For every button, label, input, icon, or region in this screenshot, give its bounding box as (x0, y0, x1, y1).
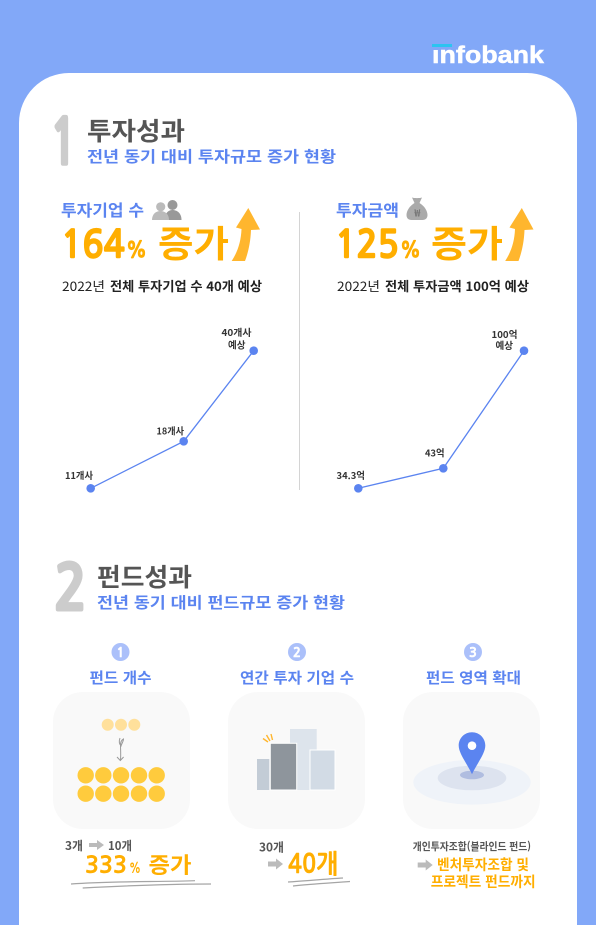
stat: 164% increase: 증가 (158, 214, 229, 268)
section 1 heading: 전년 동기 대비 투자규모 증가 현황 (87, 145, 336, 167)
stat: 164% increase: 164 (61, 226, 125, 264)
note: 2022 total companies: 2022년 (62, 276, 105, 295)
line chart: amount: 34.3억 (336, 468, 365, 482)
result: scope text: 개인투자조합(블라인드 펀드) (413, 839, 531, 854)
result: 3 to 10, 333% increase: % (129, 862, 141, 876)
line chart: amount: 100억 (492, 327, 518, 341)
panel: fund count (53, 643, 211, 888)
stat: 164% increase: % (126, 240, 147, 262)
heading: annual investments: 연간 투자 기업 수 (240, 667, 354, 688)
line chart: amount: 예상 (496, 338, 513, 352)
result: 3 to 10, 333% increase: 3개 (65, 837, 83, 854)
result: 3 to 10, 333% increase: 10개 (108, 837, 132, 854)
result: 3 to 10, 333% increase: 333 (85, 855, 127, 877)
section 1 heading (50, 112, 336, 174)
result: 30 to 40: 30개 (259, 838, 284, 856)
section 2 heading: 펀드성과 (97, 558, 192, 594)
line chart: companies: 40개사 (222, 325, 252, 339)
section 2 heading: 2 (54, 559, 87, 620)
section 2 heading: 전년 동기 대비 펀드규모 증가 현황 (97, 591, 345, 613)
label: investment companies: 투자기업 수 (61, 197, 144, 221)
result: 30 to 40: 40개 (288, 851, 338, 877)
note: 2022 total amount: 2022년 (337, 276, 380, 295)
result: scope text: 벤처투자조합 및 (437, 854, 529, 875)
result: 3 to 10, 333% increase (65, 837, 211, 888)
stat: 125% increase (335, 214, 503, 268)
icon: money bag: ₩ (413, 204, 421, 220)
result: scope text (413, 839, 536, 892)
result: scope text: 프로젝트 펀드까지 (431, 871, 536, 892)
heading: fund scope expansion: 펀드 영역 확대 (426, 667, 521, 688)
line chart: companies: 11개사 (65, 468, 93, 482)
card: map pin illustration (403, 692, 540, 829)
badge 1 (112, 643, 130, 661)
logo: infobank: infobank (432, 42, 545, 69)
badge 1: 1 (117, 646, 124, 659)
line chart: companies: 18개사 (156, 423, 184, 437)
stat: 125% increase: 125 (335, 226, 399, 264)
line chart: companies (65, 325, 258, 493)
panel: investment amount (335, 197, 534, 493)
label: investment amount: 투자금액 (336, 197, 399, 221)
badge 3 (464, 643, 482, 661)
result: 3 to 10, 333% increase: 증가 (148, 848, 192, 880)
note: 2022 total companies: 전체 투자기업 수 40개 예상 (110, 276, 262, 295)
panel: fund scope expansion (403, 643, 540, 892)
card: buildings illustration (228, 692, 365, 829)
stat: 125% increase: 증가 (431, 214, 503, 268)
section 1 heading: 투자성과 (87, 112, 185, 148)
heading: fund count: 펀드 개수 (90, 667, 152, 688)
stat: 125% increase: % (400, 240, 421, 262)
line chart: amount (336, 327, 528, 493)
divider (299, 212, 300, 490)
panel: investment companies (61, 197, 262, 493)
stat: 164% increase (61, 214, 229, 268)
icon: up arrow (505, 208, 534, 261)
line chart: companies: 예상 (228, 338, 246, 352)
section 1 heading: 1 (50, 113, 77, 174)
badge 2: 2 (293, 646, 301, 659)
badge 3: 3 (469, 646, 477, 659)
line chart: amount: 43억 (425, 446, 444, 460)
card: coins illustration (53, 692, 190, 829)
icon: people (152, 200, 182, 220)
badge 2 (288, 643, 306, 661)
section 2 heading (54, 558, 345, 620)
icon: money bag (406, 198, 428, 220)
note: 2022 total amount: 전체 투자금액 100억 예상 (385, 276, 529, 295)
panel: annual investments (228, 643, 365, 886)
result: 30 to 40 (259, 838, 350, 886)
icon: up arrow (232, 208, 260, 261)
